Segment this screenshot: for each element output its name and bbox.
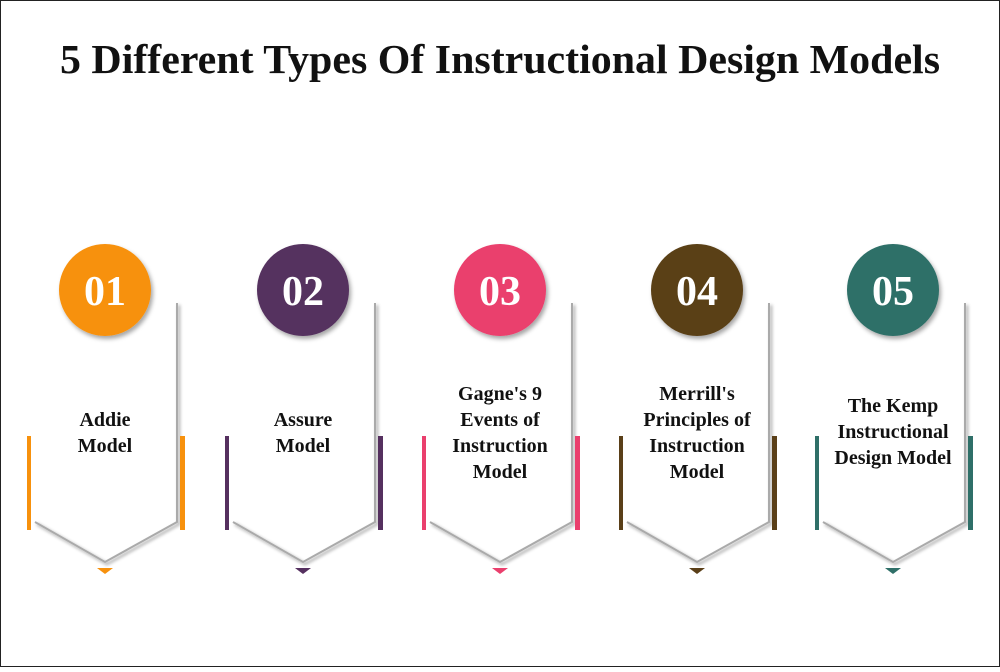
panel: 04 Merrill's Principles [619,244,777,574]
panel: 03 Gagne's 9 Events [422,244,580,574]
panel: 01 Addie Model: Addie [79,409,131,431]
panel: 04 Merrill's Principles: Instruction [649,435,745,457]
panel: 05 Kemp Model: Instructional [837,421,949,443]
panel: 03 Gagne's 9 Events: Gagne's 9 [458,383,542,405]
panel: 03 Gagne's 9 Events: Events of [460,409,540,431]
panel: 02 Assure Model: Model [276,435,331,457]
panel: 05 Kemp Model: 05 [872,269,914,315]
panel: 01 Addie Model: Model [78,435,133,457]
panel: 03 Gagne's 9 Events: 03 [479,269,521,315]
panel: 03 Gagne's 9 Events: Model [473,461,528,483]
panel: 01 Addie Model [27,244,185,574]
panel: 04 Merrill's Principles: Model [670,461,725,483]
panel: 05 Kemp Model [815,244,973,574]
panel: 02 Assure Model: Assure [274,409,332,431]
title: 5 Different Types Of Instructional Design Models [60,36,940,82]
panel: 01 Addie Model: 01 [84,269,126,315]
panel: 02 Assure Model: 02 [282,269,324,315]
panel: 04 Merrill's Principles: 04 [676,269,718,315]
panel: 04 Merrill's Principles: Principles of [643,409,751,431]
panel: 04 Merrill's Principles: Merrill's [659,383,735,405]
panel: 03 Gagne's 9 Events: Instruction [452,435,548,457]
panel: 02 Assure Model [225,244,383,574]
panel: 05 Kemp Model: Design Model [834,447,952,469]
panel: 05 Kemp Model: The Kemp [848,395,938,417]
